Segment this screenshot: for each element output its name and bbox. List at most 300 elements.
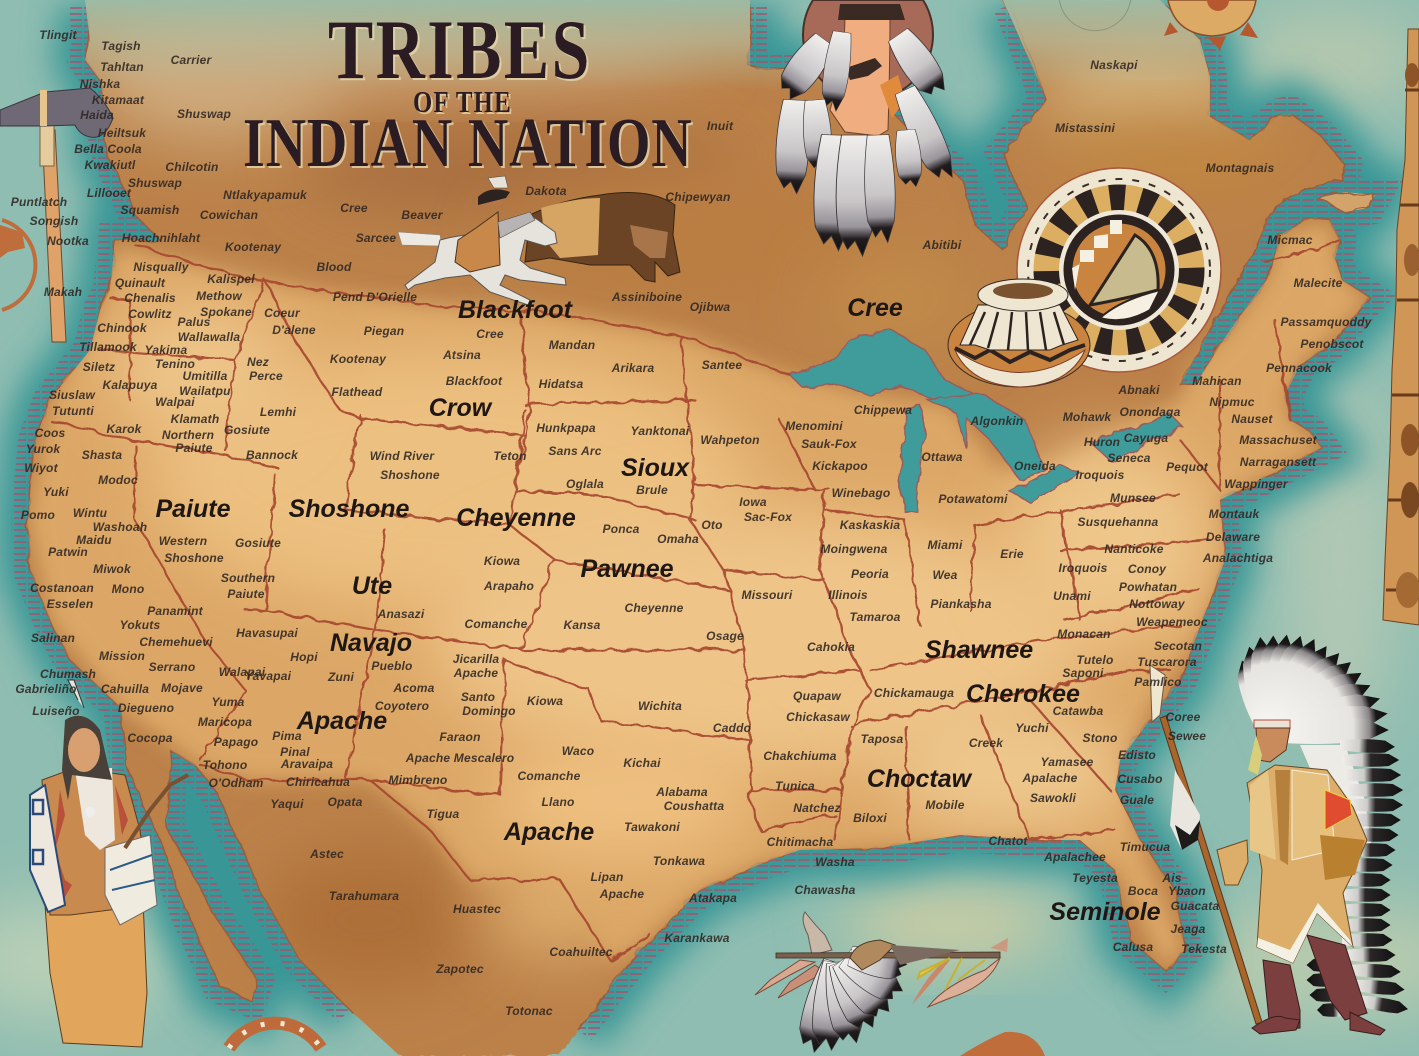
tribe labels: Great Lakes and Northeast: Iroquois xyxy=(1059,561,1108,575)
tribe labels: Pacific Northwest and California: Gabrieliño xyxy=(15,682,77,696)
tribe labels: Great Lakes and Northeast: Peoria xyxy=(851,567,889,581)
tribe labels: Southwest and Mexico: Zapotec xyxy=(435,962,484,976)
icon: small bottom emblem xyxy=(960,1032,1045,1056)
tribe labels: Great Lakes and Northeast: Nanticoke xyxy=(1104,542,1164,556)
major tribe labels: Ute xyxy=(352,572,392,600)
tribe labels: Pacific Northwest and California: Wailatpu xyxy=(179,384,231,398)
tribe labels: Pacific Northwest and California: Chinook xyxy=(97,321,148,335)
tribe labels: Southwest and Mexico: Pinal xyxy=(280,745,310,759)
tribe labels: Southwest and Mexico: Walapai xyxy=(219,665,266,679)
tribe labels: Southeast and Gulf: Natchez xyxy=(793,801,841,815)
tribe labels: Plains and Texas: Omaha xyxy=(657,532,699,546)
tribe labels: Pacific Northwest and California: Lemhi xyxy=(260,405,297,419)
major tribe labels: Apache xyxy=(503,818,594,846)
tribe labels: Pacific Northwest and California: Cahuilla xyxy=(101,682,149,696)
tribe labels: Great Lakes and Northeast: Munsee xyxy=(1110,491,1156,505)
tribe labels: Pacific Northwest and California: Kalapuya xyxy=(103,378,158,392)
tribe labels: Southeast and Gulf: Creek xyxy=(969,736,1004,750)
tribe labels: Southeast and Gulf: Saponi xyxy=(1062,666,1104,680)
tribe labels: Southwest and Mexico: Coahuiltec xyxy=(549,945,613,959)
tribe labels: Pacific Northwest and California: Siuslaw xyxy=(49,388,96,402)
tribe labels: Pacific Northwest and California: Yuki xyxy=(43,485,69,499)
tribe labels: Pacific Northwest and California: Shoshone xyxy=(164,551,224,565)
tribe labels: Southwest and Mexico: Havasupai xyxy=(236,626,298,640)
tribe labels: Southeast and Gulf: Sawokli xyxy=(1030,791,1077,805)
icon: lizard ring emblem xyxy=(229,1023,321,1048)
tribe labels: Pacific Northwest and California: Southern xyxy=(221,571,275,585)
tribe labels: Great Lakes and Northeast: Powhatan xyxy=(1119,580,1177,594)
tribe labels: Great Lakes and Northeast: Kickapoo xyxy=(812,459,868,473)
major tribe labels: Paiute xyxy=(155,495,231,523)
tribe labels: Canada and Alaska: Nootka xyxy=(47,234,89,248)
tribe labels: Southeast and Gulf: Teyesta xyxy=(1072,871,1118,885)
tribe labels: Plains and Texas: Sac-Fox xyxy=(744,510,793,524)
tribe labels: Southwest and Mexico: Totonac xyxy=(505,1004,553,1018)
tribe labels: Southwest and Mexico: Faraon xyxy=(439,730,481,744)
tribe labels: Pacific Northwest and California: Serrano xyxy=(149,660,195,674)
tribe labels: Plains and Texas: Hunkpapa xyxy=(536,421,596,435)
tribe labels: Great Lakes and Northeast: Huron xyxy=(1084,435,1120,449)
tribe labels: Canada and Alaska: Songish xyxy=(30,214,78,228)
icon: peace pipe with feathers xyxy=(755,912,1008,1055)
tribe labels: Pacific Northwest and California: Bannock xyxy=(246,448,299,462)
tribe labels: Southwest and Mexico: Pima xyxy=(272,729,302,743)
tribe labels: Canada and Alaska: Chipewyan xyxy=(665,190,731,204)
tribe labels: Canada and Alaska: Mistassini xyxy=(1055,121,1115,135)
tribe labels: Great Lakes and Northeast: Massachuset xyxy=(1239,433,1318,447)
tribe labels: Southeast and Gulf: Quapaw xyxy=(793,689,841,703)
tribe labels: Southwest and Mexico: Opata xyxy=(327,795,363,809)
tribe labels: Pacific Northwest and California: Yokuts xyxy=(120,618,161,632)
tribe labels: Pacific Northwest and California: Spokane xyxy=(200,305,252,319)
tribe labels: Southeast and Gulf: Tekesta xyxy=(1181,942,1227,956)
tribe labels: Plains and Texas: Llano xyxy=(542,795,574,809)
tribe labels: Great Lakes and Northeast: Onondaga xyxy=(1120,405,1181,419)
tribe labels: Pacific Northwest and California: Paiute xyxy=(227,587,265,601)
tribe labels: Pacific Northwest and California: Nez xyxy=(247,355,269,369)
tribe labels: Plains and Texas: Iowa xyxy=(739,495,767,509)
tribe labels: Southeast and Gulf xyxy=(763,627,1227,956)
tribe labels: Great Lakes and Northeast: Mahican xyxy=(1192,374,1242,388)
tribe labels: Great Lakes and Northeast: Sauk-Fox xyxy=(801,437,858,451)
tribe labels: Southwest and Mexico: Tohono xyxy=(203,758,247,772)
tribe labels: Great Lakes and Northeast: Abnaki xyxy=(1117,383,1160,397)
tribe labels: Great Lakes and Northeast: Chippewa xyxy=(854,403,912,417)
tribe labels: Pacific Northwest and California: Karok xyxy=(106,422,143,436)
tribe labels: Canada and Alaska: Heiltsuk xyxy=(98,126,147,140)
tribe labels: Southwest and Mexico: Pueblo xyxy=(371,659,413,673)
Great Lakes xyxy=(790,330,1182,512)
tribe labels: Pacific Northwest and California: Gosiute xyxy=(235,536,281,550)
tribe labels: Plains and Texas: Sans Arc xyxy=(548,444,602,458)
tribe labels: Pacific Northwest and California: Chumash xyxy=(40,667,96,681)
tribe labels: Great Lakes and Northeast xyxy=(785,233,1373,654)
tribe labels: Plains and Texas: Yanktonai xyxy=(631,424,690,438)
tribe labels: Southwest and Mexico: Tigua xyxy=(427,807,460,821)
tribe labels: Plains and Texas: Missouri xyxy=(742,588,793,602)
tribe labels: Southwest and Mexico: Papago xyxy=(214,735,258,749)
tribe labels: Canada and Alaska: Tagish xyxy=(101,39,141,53)
tribe labels: Pacific Northwest and California: Cocopa xyxy=(127,731,173,745)
tribe labels: Pacific Northwest and California: Patwin xyxy=(48,545,88,559)
tribe labels: Plains and Texas: Comanche xyxy=(465,617,528,631)
tribe labels: Southeast and Gulf: Sewee xyxy=(1168,729,1206,743)
tribe labels: Canada and Alaska: Assiniboine xyxy=(611,290,682,304)
tribe labels: Pacific Northwest and California: Palus xyxy=(177,315,211,329)
tribe labels: Canada and Alaska: Ojibwa xyxy=(690,300,730,314)
tribe labels: Canada and Alaska: Inuit xyxy=(707,119,734,133)
tribe labels: Pacific Northwest and California: Wintu xyxy=(73,506,108,520)
tribe labels: Southwest and Mexico: Apache Mescalero xyxy=(405,751,514,765)
tribe labels: Pacific Northwest and California: Maidu xyxy=(76,533,112,547)
tribe labels: Southeast and Gulf: Timucua xyxy=(1120,840,1170,854)
tribe labels: Canada and Alaska: Lillooet xyxy=(87,186,132,200)
tribe labels: Plains and Texas: Teton xyxy=(493,449,527,463)
tribe labels: Southwest and Mexico: Hopi xyxy=(290,650,318,664)
tribe labels: Canada and Alaska: Nishka xyxy=(80,77,120,91)
tribe labels: Pacific Northwest and California: Wiyot xyxy=(24,461,59,475)
tribe labels: Pacific Northwest and California: Northern xyxy=(162,428,214,442)
tribe labels: Great Lakes and Northeast: Ottawa xyxy=(921,450,963,464)
title: INDIAN NATION xyxy=(243,104,693,181)
tribe labels: Canada and Alaska: Squamish xyxy=(121,203,179,217)
tribe labels: Southeast and Gulf: Taposa xyxy=(861,732,904,746)
tribe labels: Pacific Northwest and California: Tutunti xyxy=(52,404,94,418)
major tribe labels: Blackfoot xyxy=(458,296,574,324)
tribe labels: Pacific Northwest and California: Wallawalla xyxy=(178,330,240,344)
tribe labels: Plains and Texas: Wahpeton xyxy=(700,433,760,447)
tribe labels: Southwest and Mexico: Chiricahua xyxy=(286,775,350,789)
tribe labels: Canada and Alaska: Blood xyxy=(316,260,352,274)
tribe labels: Great Lakes and Northeast: Wea xyxy=(932,568,958,582)
tribe labels: Canada and Alaska: Shuswap xyxy=(177,107,231,121)
tribe labels: Pacific Northwest and California: Miwok xyxy=(93,562,132,576)
tribe labels: Plains and Texas: Comanche xyxy=(518,769,581,783)
tribe labels: Plains and Texas: Lipan xyxy=(590,870,624,884)
tribe labels: Southeast and Gulf: Calusa xyxy=(1113,940,1153,954)
tribe labels: Plains and Texas: Mandan xyxy=(549,338,595,352)
tribe labels: Great Lakes and Northeast: Mohawk xyxy=(1063,410,1112,424)
tribe labels: Pacific Northwest and California: Pomo xyxy=(21,508,55,522)
tribe labels: Southwest and Mexico: Apache xyxy=(453,666,498,680)
tribe labels: Pacific Northwest and California: Coos xyxy=(35,426,66,440)
tribe labels: Plains and Texas: Karankawa xyxy=(664,931,730,945)
tribe labels: Canada and Alaska: Kitamaat xyxy=(92,93,145,107)
tribe labels: Canada and Alaska: Sarcee xyxy=(356,231,396,245)
tribe labels: Great Lakes and Northeast: Kaskaskia xyxy=(840,518,900,532)
tribe labels: Great Lakes and Northeast: Pennacook xyxy=(1266,361,1333,375)
tribe labels: Pacific Northwest and California: Perce xyxy=(249,369,283,383)
tribe labels: Pacific Northwest and California: Makah xyxy=(44,285,82,299)
tribe labels: Southeast and Gulf: Monacan xyxy=(1057,627,1111,641)
tribe labels: Southwest and Mexico xyxy=(198,607,613,1018)
tribe labels: Great Lakes and Northeast: Weapemeoc xyxy=(1136,615,1208,629)
tribe labels: Great Lakes and Northeast: Montauk xyxy=(1209,507,1260,521)
tribe labels: Southwest and Mexico: Aravaipa xyxy=(280,757,333,771)
tribe labels: Great Lakes and Northeast: Cahokia xyxy=(807,640,855,654)
tribe labels: Great Lakes and Northeast: Susquehanna xyxy=(1078,515,1159,529)
tribe labels: Great Lakes and Northeast: Penobscot xyxy=(1300,337,1364,351)
tribe labels: Southeast and Gulf: Pamlico xyxy=(1134,675,1182,689)
tribe labels: Plains and Texas: Kiowa xyxy=(484,554,520,568)
tribe labels: Southeast and Gulf: Yamasee xyxy=(1040,755,1094,769)
icon: turtle xyxy=(1164,0,1258,50)
tribe labels: Plains and Texas: Arikara xyxy=(611,361,655,375)
tribe labels: Southeast and Gulf: Ybaon xyxy=(1168,884,1206,898)
tribe labels: Canada and Alaska: Tahltan xyxy=(100,60,144,74)
tribe labels: Southeast and Gulf: Chatot xyxy=(988,834,1028,848)
tribe labels: Great Lakes and Northeast: Nipmuc xyxy=(1209,395,1255,409)
tribe labels: Plains and Texas: Wichita xyxy=(638,699,682,713)
tribe labels: Plains and Texas: Tonkawa xyxy=(653,854,705,868)
tribe labels: Plains and Texas: Atakapa xyxy=(688,891,737,905)
tribe labels: Pacific Northwest and California: Mission xyxy=(99,649,145,663)
tribe labels: Pacific Northwest and California: Diegueno xyxy=(118,701,174,715)
tribe labels: Pacific Northwest and California: Salinan xyxy=(31,631,75,645)
tribe labels: Southeast and Gulf: Boca xyxy=(1128,884,1158,898)
tribe labels: Southeast and Gulf: Yuchi xyxy=(1015,721,1049,735)
icon: horse rider chasing buffalo xyxy=(398,176,680,305)
tribe labels: Southeast and Gulf: Chitimacha xyxy=(767,835,833,849)
icon: tomahawk xyxy=(0,88,113,342)
tribe labels: Pacific Northwest and California: Chenalis xyxy=(124,291,176,305)
tribe labels: Great Lakes and Northeast: Iroquois xyxy=(1076,468,1125,482)
tribe labels: Pacific Northwest and California: Modoc xyxy=(98,473,138,487)
major tribe labels: Shawnee xyxy=(925,636,1033,664)
tribe labels: Southwest and Mexico: Mimbreno xyxy=(389,773,447,787)
tribe labels: Southeast and Gulf: Guale xyxy=(1120,793,1154,807)
tribe labels: Great Lakes and Northeast: Pequot xyxy=(1166,460,1209,474)
tribe labels: Southeast and Gulf: Coree xyxy=(1165,710,1201,724)
tribe labels: Canada and Alaska: Chilcotin xyxy=(165,160,219,174)
tribe labels: Southwest and Mexico: Astec xyxy=(309,847,344,861)
tribe labels: Pacific Northwest and California: Walpai xyxy=(155,395,195,409)
tribe labels: Pacific Northwest and California: Panamint xyxy=(147,604,204,618)
faint compass circle xyxy=(1059,0,1131,31)
tribe labels: Plains and Texas: Ponca xyxy=(602,522,640,536)
tribe labels: Great Lakes and Northeast: Miami xyxy=(927,538,963,552)
major tribe labels: Cheyenne xyxy=(456,504,576,532)
tribe labels: Great Lakes and Northeast: Erie xyxy=(1000,547,1024,561)
tribe labels: Great Lakes and Northeast: Algonkin xyxy=(970,414,1023,428)
tribe labels: Great Lakes and Northeast: Passamquoddy xyxy=(1280,315,1373,329)
tribe labels: Southeast and Gulf: Edisto xyxy=(1118,748,1156,762)
tribe labels: Plains and Texas: Hidatsa xyxy=(539,377,583,391)
tribe labels: Great Lakes and Northeast: Piankasha xyxy=(930,597,992,611)
tribe labels: Plains and Texas: Atsina xyxy=(442,348,481,362)
tribe labels: Pacific Northwest and California: Mono xyxy=(112,582,144,596)
tribe labels: Pacific Northwest and California: Washoah xyxy=(93,520,147,534)
tribe labels: Pacific Northwest and California: Western xyxy=(159,534,207,548)
tribe labels: Canada and Alaska: Puntlatch xyxy=(11,195,67,209)
tribe labels: Great Lakes and Northeast: Winebago xyxy=(832,486,890,500)
tribe labels: Plains and Texas: Kansa xyxy=(563,618,601,632)
icon: chief with war bonnet and spear xyxy=(1150,632,1409,1035)
tribe labels: Southwest and Mexico: Zuni xyxy=(327,670,355,684)
tribe labels: Southeast and Gulf: Chakchiuma xyxy=(763,749,837,763)
tribe labels: Great Lakes and Northeast: Narragansett xyxy=(1240,455,1317,469)
tribe labels: Southeast and Gulf: Biloxi xyxy=(853,811,887,825)
title: OF THE xyxy=(413,85,512,120)
tribe labels: Plains and Texas: Cree xyxy=(476,327,504,341)
tribe labels: Canada and Alaska: Carrier xyxy=(171,53,213,67)
tribe labels: Plains and Texas: Osage xyxy=(706,629,744,643)
tribe labels: Plains and Texas: Wind River xyxy=(370,449,435,463)
tribe labels: Great Lakes and Northeast: Malecite xyxy=(1294,276,1343,290)
tribe labels: Southeast and Gulf: Mobile xyxy=(925,798,965,812)
major tribe labels: Pawnee xyxy=(580,555,674,583)
tribe labels: Canada and Alaska: Montagnais xyxy=(1206,161,1274,175)
tribe labels: Pacific Northwest and California: Shasta xyxy=(82,448,122,462)
tribe labels: Southeast and Gulf: Chickasaw xyxy=(786,710,850,724)
tribe labels: Plains and Texas xyxy=(330,324,793,945)
tribe labels: Canada and Alaska: Tlingit xyxy=(39,28,77,42)
tribe labels: Pacific Northwest and California: Esselen xyxy=(47,597,93,611)
tribe labels: Great Lakes and Northeast: Nottoway xyxy=(1129,597,1186,611)
tribal territory boundaries xyxy=(50,240,1338,960)
tribe labels: Pacific Northwest and California: Paiute xyxy=(175,441,213,455)
tribe labels: Pacific Northwest and California: Kalispel xyxy=(207,272,255,286)
tribe labels: Southeast and Gulf: Cusabo xyxy=(1117,772,1163,786)
tribe labels: Southeast and Gulf: Apalache xyxy=(1022,771,1078,785)
tribe labels: Southwest and Mexico: Santo xyxy=(461,690,495,704)
tribe labels: Plains and Texas: Caddo xyxy=(713,721,751,735)
tribe labels: Pacific Northwest and California: Methow xyxy=(196,289,242,303)
tribe labels: Great Lakes and Northeast: Unami xyxy=(1053,589,1091,603)
tribe labels: Pacific Northwest and California: Klamath xyxy=(171,412,219,426)
icon: pottery bowl xyxy=(948,279,1090,387)
tribe labels: Southwest and Mexico: O'Odham xyxy=(209,776,264,790)
tribe labels: Plains and Texas: Kichai xyxy=(623,756,661,770)
tribe labels: Pacific Northwest and California: Coeur xyxy=(264,306,301,320)
tribe labels: Plains and Texas: Apache xyxy=(599,887,644,901)
tribe labels: Pacific Northwest and California: Cowlitz xyxy=(128,307,172,321)
tribe labels: Southwest and Mexico: Domingo xyxy=(462,704,516,718)
tribe labels: Pacific Northwest and California: Quinault xyxy=(115,276,166,290)
tribe labels: Plains and Texas: Blackfoot xyxy=(446,374,503,388)
tribe labels: Pacific Northwest and California: Chemehuevi xyxy=(139,635,213,649)
tribe labels: Southeast and Gulf: Stono xyxy=(1082,731,1118,745)
tribe labels: Great Lakes and Northeast: Micmac xyxy=(1267,233,1313,247)
icon: feathered shield xyxy=(772,0,961,256)
tribe labels: Great Lakes and Northeast: Illinois xyxy=(828,588,868,602)
tribe labels: Southwest and Mexico: Huastec xyxy=(453,902,501,916)
tribe labels: Plains and Texas: Arapaho xyxy=(483,579,534,593)
tribe labels: Canada and Alaska: Cree xyxy=(340,201,368,215)
tribe labels: Great Lakes and Northeast: Potawatomi xyxy=(938,492,1008,506)
tribe labels: Pacific Northwest and California: Tenino xyxy=(155,357,195,371)
tribe labels: Southeast and Gulf: Apalachee xyxy=(1043,850,1106,864)
tribe labels: Canada and Alaska: Naskapi xyxy=(1090,58,1138,72)
tribe labels: Pacific Northwest and California: Umitilla xyxy=(183,369,228,383)
tribe labels: Canada and Alaska: Bella Coola xyxy=(74,142,142,156)
tribe labels: Pacific Northwest and California: Yurok xyxy=(26,442,61,456)
tribe labels: Canada and Alaska xyxy=(11,28,1274,314)
tribe labels: Great Lakes and Northeast: Tamaroa xyxy=(850,610,901,624)
tribe labels: Southwest and Mexico: Yuma xyxy=(211,695,245,709)
major tribe labels: Navajo xyxy=(330,629,412,657)
tribe labels: Plains and Texas: Cheyenne xyxy=(625,601,684,615)
major tribe labels xyxy=(155,294,1161,926)
tribe labels: Pacific Northwest and California: Gosiute xyxy=(224,423,270,437)
tribe labels: Great Lakes and Northeast: Delaware xyxy=(1206,530,1260,544)
major tribe labels: Crow xyxy=(429,394,493,422)
tribe labels: Southwest and Mexico: Maricopa xyxy=(198,715,252,729)
tribe labels: Canada and Alaska: Haida xyxy=(80,108,114,122)
major tribe labels: Shoshone xyxy=(289,495,410,523)
tribe labels: Canada and Alaska: Kwakiutl xyxy=(85,158,136,172)
tribe labels: Southwest and Mexico: Anasazi xyxy=(377,607,425,621)
tribe labels: Southwest and Mexico: Acoma xyxy=(392,681,435,695)
tribe labels: Plains and Texas: Waco xyxy=(562,744,594,758)
tribe labels: Canada and Alaska: Pend D'Orielle xyxy=(333,290,417,304)
tribe labels: Great Lakes and Northeast: Analachtiga xyxy=(1202,551,1273,565)
tribe labels: Pacific Northwest and California: D'alene xyxy=(272,323,316,337)
tribe labels: Great Lakes and Northeast: Nauset xyxy=(1231,412,1273,426)
tribe labels: Southwest and Mexico: Yaqui xyxy=(270,797,304,811)
tribe labels: Pacific Northwest and California: Luiseño xyxy=(32,704,80,718)
tribe labels: Southeast and Gulf: Ais xyxy=(1161,871,1182,885)
tribe labels: Pacific Northwest and California: Nisqually xyxy=(133,260,190,274)
tribe labels: Southwest and Mexico: Yavapai xyxy=(245,669,292,683)
icon: woman in beaded dress xyxy=(30,680,188,1047)
tribe labels: Southwest and Mexico: Tarahumara xyxy=(329,889,399,903)
title: TRIBES xyxy=(328,2,592,97)
title xyxy=(243,2,693,181)
tribe labels: Southwest and Mexico: Coyotero xyxy=(375,699,429,713)
tribe labels: Plains and Texas: Kiowa xyxy=(527,694,563,708)
tribe labels: Great Lakes and Northeast: Moingwena xyxy=(820,542,888,556)
tribe labels: Southeast and Gulf: Catawba xyxy=(1053,704,1103,718)
tribe labels: Great Lakes and Northeast: Seneca xyxy=(1107,451,1151,465)
major tribe labels: Cherokee xyxy=(966,680,1080,708)
major tribe labels: Cree xyxy=(847,294,903,322)
tribe labels: Canada and Alaska: Shuswap xyxy=(128,176,182,190)
tribe labels: Plains and Texas: Oto xyxy=(701,518,723,532)
tribe labels: Pacific Northwest and California xyxy=(15,260,316,745)
tribe labels: Plains and Texas: Shoshone xyxy=(380,468,440,482)
tribe labels: Pacific Northwest and California: Mojave xyxy=(161,681,203,695)
tribe labels: Great Lakes and Northeast: Cayuga xyxy=(1124,431,1168,445)
tribe labels: Pacific Northwest and California: Yakima xyxy=(145,343,188,357)
tribe labels: Southeast and Gulf: Tuscarora xyxy=(1137,655,1197,669)
tribe labels: Plains and Texas: Coushatta xyxy=(664,799,724,813)
major tribe labels: Apache xyxy=(296,707,387,735)
tribe labels: Plains and Texas: Tawakoni xyxy=(624,820,680,834)
tribe labels: Pacific Northwest and California: Costanoan xyxy=(30,581,94,595)
tribe labels: Southeast and Gulf: Secotan xyxy=(1154,639,1202,653)
tribe labels: Great Lakes and Northeast: Menomini xyxy=(785,419,843,433)
tribe labels: Southeast and Gulf: Tunica xyxy=(775,779,815,793)
tribe labels: Plains and Texas: Kootenay xyxy=(330,352,387,366)
tribe labels: Plains and Texas: Alabama xyxy=(655,785,708,799)
major tribe labels: Sioux xyxy=(621,454,690,482)
tribe labels: Plains and Texas: Flathead xyxy=(332,385,383,399)
tribe labels: Southeast and Gulf: Washa xyxy=(815,855,855,869)
tribe labels: Great Lakes and Northeast: Conoy xyxy=(1128,562,1167,576)
tribe labels: Canada and Alaska: Abitibi xyxy=(922,238,962,252)
tribe labels: Southeast and Gulf: Tutelo xyxy=(1077,653,1113,667)
tribe labels: Southeast and Gulf: Chickamauga xyxy=(874,686,954,700)
icon: pottery plate xyxy=(1017,168,1221,372)
tribe labels: Great Lakes and Northeast: Wappinger xyxy=(1224,477,1289,491)
tribe labels: Southeast and Gulf: Jeaga xyxy=(1170,922,1206,936)
major tribe labels: Choctaw xyxy=(867,765,973,793)
totem pole right edge xyxy=(1383,29,1419,625)
tribe labels: Plains and Texas: Santee xyxy=(702,358,742,372)
tribe labels: Canada and Alaska: Cowichan xyxy=(200,208,258,222)
tribe labels: Canada and Alaska: Kootenay xyxy=(225,240,282,254)
